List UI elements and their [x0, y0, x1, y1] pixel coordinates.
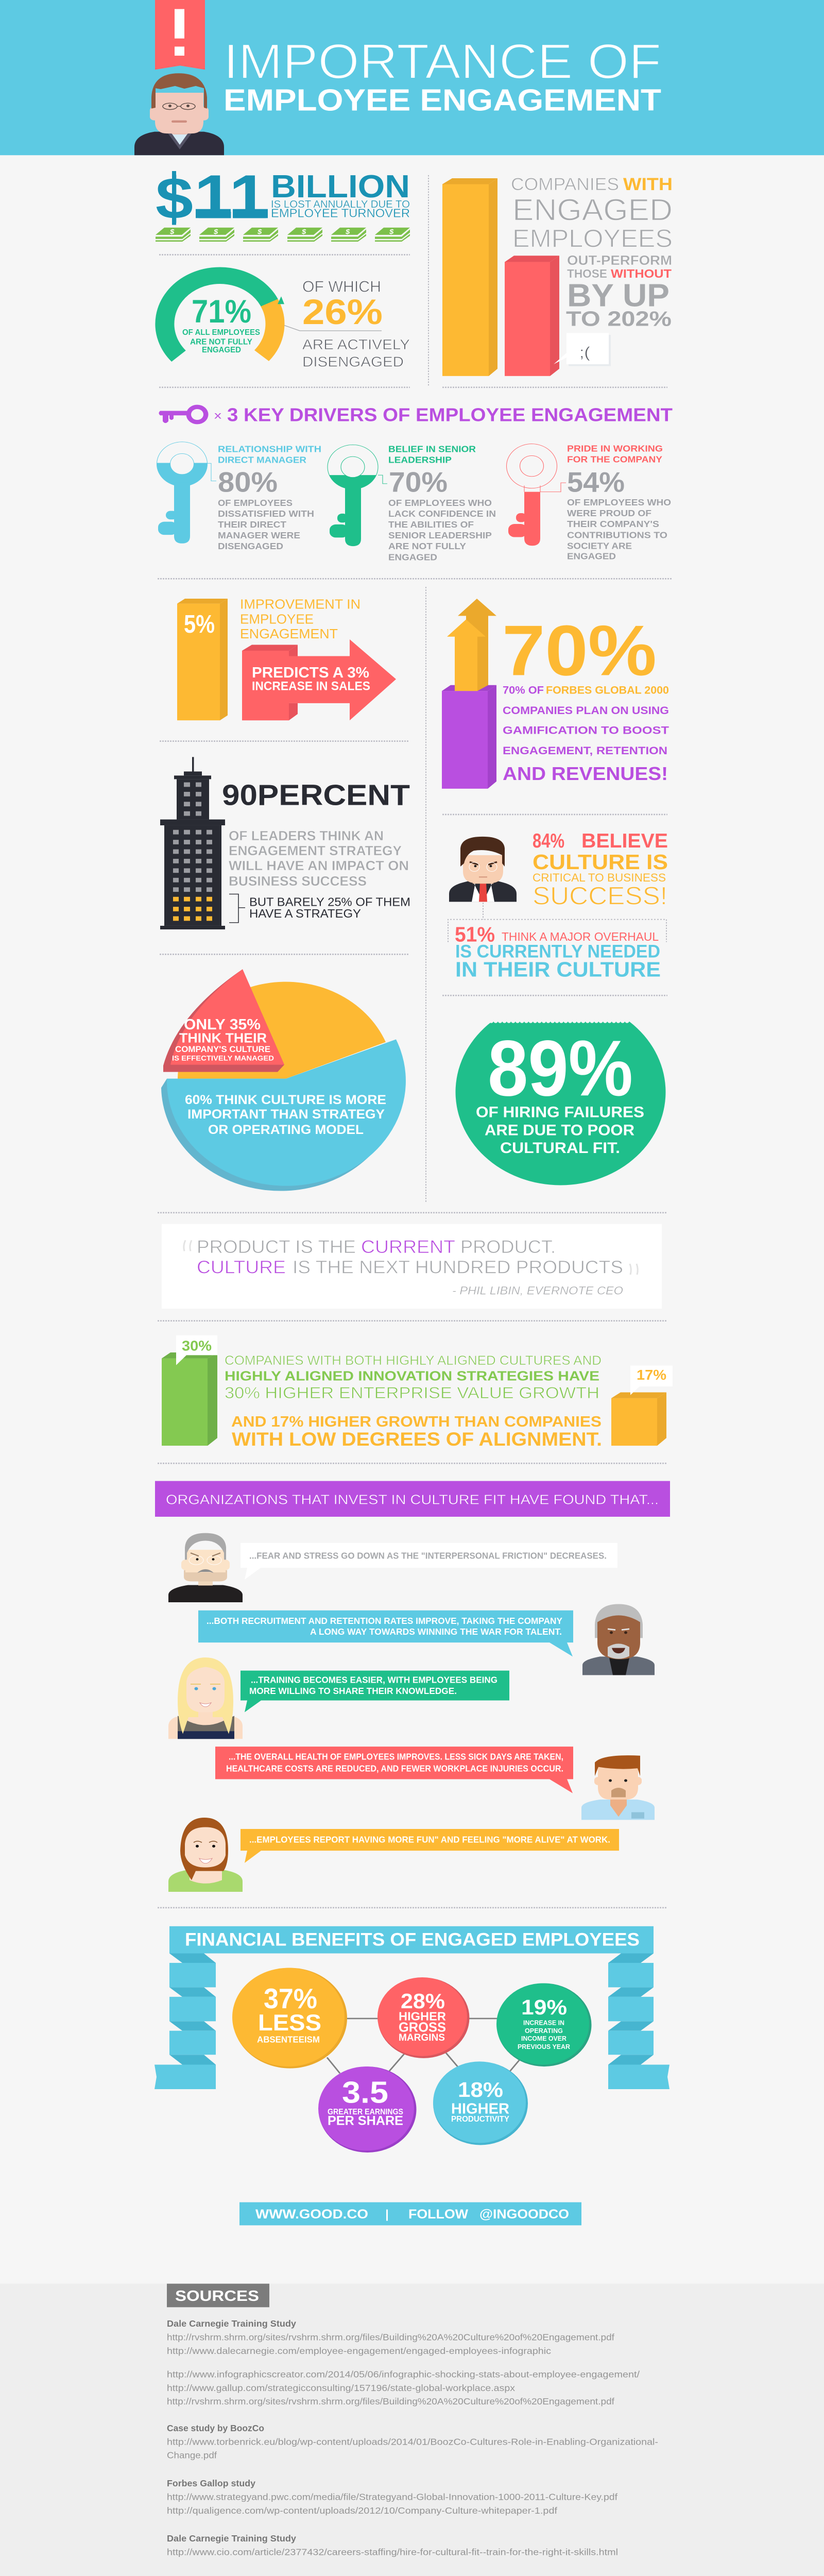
- panel: 90 percent of leaders: [160, 757, 410, 929]
- portrait: man in suit: [449, 837, 517, 902]
- quote text: PRODUCT.: [460, 1236, 556, 1257]
- speech bubble: HEALTHCARE COSTS ARE REDUCED, AND FEWER WORKPLACE INJURIES OCCUR.: [226, 1764, 563, 1773]
- connector lines: [327, 2019, 520, 2073]
- panel: driver relationship with manager: [157, 442, 321, 552]
- pie label: 35 percent: ONLY 35%: [184, 1016, 261, 1033]
- heading: $11 billion: EMPLOYEE TURNOVER: [271, 207, 410, 220]
- bubble: 37 percent less absenteeism: [232, 1968, 347, 2069]
- quote text: IS THE NEXT HUNDRED PRODUCTS: [293, 1257, 623, 1277]
- banner: culture fit: [155, 1481, 670, 1517]
- heading: $11 billion: [156, 162, 410, 231]
- text: culture critical to success: [533, 829, 668, 910]
- text: 51 percent overhaul: [455, 923, 661, 981]
- row: more fun: [168, 1818, 619, 1892]
- chart: culture pie: [161, 969, 406, 1191]
- text: culture critical to success: SUCCESS!: [533, 882, 667, 910]
- row: fear and stress: [168, 1533, 617, 1602]
- text: pride in working for the company: PRIDE IN WORKING: [567, 444, 663, 454]
- panel: driver pride in company: [507, 444, 671, 562]
- text: 51 percent overhaul: IS CURRENTLY NEEDED: [455, 941, 660, 961]
- quote text: [197, 1236, 623, 1297]
- text: 51 percent overhaul: IN THEIR CULTURE: [455, 958, 661, 981]
- text: belief in senior leadership: OF EMPLOYEES WHO: [388, 498, 492, 509]
- panel: 89 percent hiring failures: [455, 1021, 666, 1185]
- footer banner: website and social: WWW.GOOD.CO: [255, 2207, 368, 2222]
- gauge label: ARE NOT FULLY: [190, 337, 252, 346]
- bubble: 3.5 greater earnings per share: PER SHARE: [328, 2113, 403, 2128]
- pie label: 35 percent: [172, 1016, 274, 1062]
- text: 26 percent actively disengaged: 26%: [302, 292, 383, 332]
- ribbon: left: [154, 1953, 216, 2089]
- speech bubble: [215, 1747, 573, 1793]
- text: aligned cultures growth: 30% HIGHER ENTERPRISE VALUE GROWTH: [225, 1384, 599, 1402]
- gauge label: 71%: [192, 294, 251, 330]
- text: aligned cultures growth: HIGHLY ALIGNED INNOVATION STRATEGIES HAVE: [225, 1368, 599, 1383]
- source list: http://qualigence.com/wp-content/uploads/2012/10/Company-Culture-whitepaper-1.pdf: [167, 2505, 558, 2516]
- bubble: 19 percent operating income: INCOME OVER: [521, 2035, 566, 2042]
- bubble: 19 percent operating income: PREVIOUS YEAR: [518, 2043, 570, 2050]
- row: training becomes easier: [168, 1657, 509, 1739]
- text: pride in working for the company: WERE PROUD OF: [567, 509, 651, 519]
- pie label: 35 percent: IS EFFECTIVELY MANAGED: [172, 1055, 274, 1062]
- text: hiring failures: OF HIRING FAILURES: [476, 1103, 644, 1121]
- text: relationship with direct manager: RELATIONSHIP WITH: [218, 444, 321, 454]
- text: 90 percent leaders strategy: ENGAGEMENT STRATEGY: [229, 843, 402, 858]
- source list: Forbes Gallop study: [167, 2478, 255, 2488]
- sources heading: SOURCES: [175, 2287, 259, 2304]
- text: aligned cultures growth: WITH LOW DEGREES OF ALIGNMENT.: [232, 1429, 602, 1450]
- icons: money stacks: $: [257, 228, 262, 235]
- icon: purple key: [159, 405, 208, 424]
- panel: 5 percent improvement: [177, 596, 396, 720]
- quote text: CULTURE: [197, 1257, 286, 1277]
- text: companies with engaged employees: EMPLOYEES: [512, 225, 673, 253]
- text: improvement in employee engagement: ENGAGEMENT: [240, 626, 338, 641]
- portrait: woman with auburn hair: [168, 1818, 243, 1892]
- footer banner: website and social: @INGOODCO: [479, 2207, 569, 2222]
- text: relationship with direct manager: OF EMPLOYEES: [218, 498, 293, 509]
- text: relationship with direct manager: [218, 444, 321, 552]
- chart: green bar 30 percent: 30%: [182, 1338, 212, 1354]
- source list: http://www.strategyand.pwc.com/media/file/Strategyand-Global-Innovation-1000-2011-Culture-Key.pdf: [167, 2492, 618, 2502]
- panel: aligned cultures: [162, 1335, 673, 1450]
- text: companies with engaged employees: OUT-PERFORM: [567, 252, 672, 267]
- icon: skyscraper: [160, 757, 225, 929]
- portrait: man with glasses: [134, 73, 224, 155]
- icons: money stacks: $: [213, 228, 218, 235]
- bubble: 19 percent operating income: [496, 1983, 591, 2066]
- banner: culture fit: ORGANIZATIONS THAT INVEST IN CULTURE FIT HAVE FOUND THAT...: [166, 1492, 659, 1507]
- chart: yellow bar 5 percent: 5%: [184, 610, 215, 638]
- title: [224, 33, 661, 117]
- text: 90 percent leaders strategy: BUT BARELY 25% OF THEM: [249, 896, 410, 909]
- text: 70 percent forbes global 2000: 70%: [502, 610, 657, 690]
- text: relationship with direct manager: DIRECT MANAGER: [218, 455, 306, 465]
- text: 26 percent actively disengaged: [284, 277, 410, 370]
- bubble: 28 percent higher gross margins: MARGINS: [399, 2032, 445, 2043]
- text: hiring failures: ARE DUE TO POOR: [485, 1122, 634, 1139]
- text: culture critical to success: BELIEVE: [581, 829, 668, 852]
- row: recruitment and retention: [198, 1604, 655, 1675]
- speech bubble: ...THE OVERALL HEALTH OF EMPLOYEES IMPROVES. LESS SICK DAYS ARE TAKEN,: [229, 1752, 563, 1761]
- source list: Dale Carnegie Training Study: [167, 2533, 297, 2544]
- text: 51 percent overhaul: 51%: [455, 923, 495, 946]
- text: relationship with direct manager: 80%: [218, 467, 278, 498]
- speech bubble: [241, 1829, 619, 1863]
- source list: Change.pdf: [167, 2450, 217, 2460]
- text: belief in senior leadership: LEADERSHIP: [388, 455, 452, 465]
- panel: 89 percent hiring failures: 89%: [488, 1024, 633, 1112]
- text: culture critical to success: CULTURE IS: [533, 851, 668, 874]
- source list: http://www.gallup.com/strategicconsulting/157196/state-global-workplace.aspx: [167, 2383, 516, 2393]
- text: companies with engaged employees: BY UP: [567, 278, 670, 314]
- text: 70 percent forbes global 2000: ENGAGEMENT, RETENTION: [503, 744, 667, 757]
- footer banner: website and social: [239, 2202, 581, 2225]
- quote text: PRODUCT IS THE: [197, 1236, 356, 1257]
- source list: Dale Carnegie Training Study: [167, 2318, 297, 2329]
- callout: sad face speech bubble: [554, 333, 611, 366]
- chart: red bar: [505, 256, 559, 376]
- pie label: 60 percent: IMPORTANT THAN STRATEGY: [187, 1107, 385, 1122]
- portrait: grey-haired man in black: [168, 1533, 243, 1602]
- heading banner: [169, 1926, 654, 1953]
- text: 70 percent forbes global 2000: 70% OF: [503, 684, 544, 696]
- text: 26 percent actively disengaged: OF WHICH: [302, 277, 381, 295]
- text: relationship with direct manager: DISSATISFIED WITH: [218, 509, 314, 519]
- text: improvement in employee engagement: EMPLOYEE: [240, 611, 314, 626]
- text: companies with engaged employees: COMPANIES: [511, 174, 619, 194]
- sources heading: [167, 2284, 269, 2307]
- text: 70 percent forbes global 2000: FORBES GLOBAL 2000: [546, 684, 669, 696]
- gauge label: ENGAGED: [202, 346, 241, 354]
- text: belief in senior leadership: SENIOR LEADERSHIP: [388, 531, 492, 541]
- speech bubble: A LONG WAY TOWARDS WINNING THE WAR FOR TALENT.: [310, 1626, 562, 1637]
- portrait: blonde woman: [168, 1657, 243, 1739]
- panel: 84 percent believe culture: [449, 829, 668, 910]
- text: culture critical to success: 84%: [533, 829, 564, 852]
- text: 90 percent leaders strategy: HAVE A STRATEGY: [249, 908, 361, 921]
- bubble: 18 percent higher productivity: PRODUCTIVITY: [451, 2115, 509, 2124]
- text: pride in working for the company: [567, 444, 671, 562]
- speech bubble: MORE WILLING TO SHARE THEIR KNOWLEDGE.: [249, 1686, 457, 1696]
- text: companies with engaged employees: WITHOUT: [611, 268, 672, 281]
- source list: http://rvshrm.shrm.org/sites/rvshrm.shrm.org/files/Building%20A%20Culture%20of%20Engagement.pdf: [167, 2396, 615, 2406]
- speech bubble: ...TRAINING BECOMES EASIER, WITH EMPLOYEES BEING: [251, 1674, 497, 1685]
- icons: money stacks: $: [389, 228, 394, 235]
- title: EMPLOYEE ENGAGEMENT: [224, 82, 661, 117]
- bubble: 19 percent operating income: OPERATING: [525, 2027, 563, 2035]
- bubble: 37 percent less absenteeism: LESS: [258, 2010, 321, 2036]
- icons: money stacks: $: [345, 228, 350, 235]
- panel: sources: [0, 2284, 824, 2576]
- text: belief in senior leadership: ARE NOT FULLY: [388, 541, 466, 552]
- speech bubble: ...EMPLOYEES REPORT HAVING MORE FUN" AND FEELING "MORE ALIVE" AT WORK.: [249, 1834, 610, 1844]
- icons: money stacks: $: [301, 228, 306, 235]
- speech bubble: [241, 1543, 617, 1580]
- chart: donut gauge: [165, 276, 284, 356]
- speech bubble: [198, 1611, 573, 1656]
- text: pride in working for the company: SOCIETY ARE: [567, 541, 632, 551]
- text: hiring failures: CULTURAL FIT.: [500, 1139, 620, 1156]
- icon: blue key 80 percent: [157, 442, 216, 544]
- arrow: predicts 3 percent increase in sales: INCREASE IN SALES: [252, 680, 370, 693]
- text: 26 percent actively disengaged: DISENGAGED: [302, 354, 404, 370]
- text: 70 percent forbes global 2000: [502, 610, 669, 785]
- icons: money stacks: $: [169, 228, 175, 235]
- panel: quote: [162, 1224, 662, 1309]
- arrow: predicts 3 percent increase in sales: [242, 639, 396, 720]
- source list: http://www.infographicscreator.com/2014/05/06/infographic-shocking-stats-about-employee-engagement/: [167, 2369, 640, 2379]
- text: belief in senior leadership: BELIEF IN SENIOR: [388, 444, 476, 454]
- speech bubble: [241, 1671, 509, 1712]
- bubble: 37 percent less absenteeism: 37%: [264, 1983, 317, 2014]
- text: belief in senior leadership: [388, 444, 496, 563]
- gauge label: [182, 294, 260, 354]
- bubble: 3.5 greater earnings per share: 3.5: [342, 2075, 388, 2109]
- icons: money stacks: [156, 228, 410, 242]
- chart: yellow bar 17 percent: [611, 1366, 673, 1446]
- chart: yellow bar 5 percent: [177, 599, 228, 720]
- text: belief in senior leadership: THE ABILITIES OF: [388, 520, 474, 530]
- pie label: 60 percent: OR OPERATING MODEL: [208, 1123, 364, 1137]
- text: 90 percent leaders strategy: [222, 778, 410, 923]
- source list: http://www.torbenrick.eu/blog/wp-content/uploads/2014/01/BoozCo-Cultures-Role-in-Enabling-Organizational-: [167, 2436, 658, 2447]
- icon: green key 70 percent: [328, 445, 387, 546]
- text: culture critical to success: CRITICAL TO BUSINESS: [533, 871, 666, 884]
- text: improvement in employee engagement: IMPROVEMENT IN: [240, 596, 360, 612]
- heading: 3 key drivers: 3 KEY DRIVERS OF EMPLOYEE ENGAGEMENT: [227, 405, 673, 426]
- quote text: - PHIL LIBIN, EVERNOTE CEO: [452, 1284, 623, 1297]
- ribbon: right: [608, 1953, 670, 2089]
- portrait: man with goatee: [581, 1755, 655, 1820]
- panel: 70 percent gamification: [442, 599, 669, 789]
- bubble: 28 percent higher gross margins: 28%: [401, 1990, 445, 2013]
- bubble: 19 percent operating income: 19%: [521, 1996, 567, 2019]
- source list: [167, 2318, 658, 2557]
- bubble: 18 percent higher productivity: 18%: [458, 2078, 503, 2102]
- text: hiring failures: [476, 1103, 644, 1156]
- pie label: 60 percent: 60% THINK CULTURE IS MORE: [185, 1093, 386, 1107]
- chart: purple bar with rising arrows: [442, 599, 496, 789]
- chart: green bar 30 percent: [162, 1335, 217, 1446]
- bubble: 18 percent higher productivity: [433, 2061, 528, 2145]
- panel: 51 percent major overhaul: [448, 903, 666, 981]
- text: 90 percent leaders strategy: 90PERCENT: [222, 778, 410, 811]
- text: pride in working for the company: ENGAGED: [567, 552, 616, 562]
- pie label: 60 percent: [185, 1093, 386, 1137]
- chart: yellow bar 17 percent: 17%: [637, 1367, 666, 1383]
- text: aligned cultures growth: COMPANIES WITH BOTH HIGHLY ALIGNED CULTURES AND: [225, 1353, 602, 1367]
- bubble: 28 percent higher gross margins: GROSS: [399, 2019, 446, 2035]
- heading: 3 key drivers: x: [214, 410, 222, 421]
- bubble: 19 percent operating income: INCREASE IN: [523, 2019, 564, 2026]
- bubble: 37 percent less absenteeism: ABSENTEEISM: [257, 2035, 320, 2044]
- icon: red ribbon with exclamation mark: [155, 0, 205, 70]
- source list: http://rvshrm.shrm.org/sites/rvshrm.shrm.org/files/Building%20A%20Culture%20of%20Engagement.pdf: [167, 2332, 615, 2342]
- text: aligned cultures growth: [225, 1353, 602, 1450]
- footer banner: website and social: FOLLOW: [408, 2207, 468, 2222]
- pie label: 35 percent: THINK THEIR: [179, 1030, 267, 1045]
- chart: yellow bar: [442, 178, 497, 376]
- text: 70 percent forbes global 2000: COMPANIES PLAN ON USING: [503, 704, 669, 717]
- arrow: predicts 3 percent increase in sales: PREDICTS A 3%: [252, 664, 369, 681]
- quote marks: [184, 1240, 638, 1275]
- speech bubble: ...FEAR AND STRESS GO DOWN AS THE "INTERPERSONAL FRICTION" DECREASES.: [249, 1551, 607, 1561]
- heading: $11 billion: IS LOST ANNUALLY DUE TO: [271, 198, 410, 210]
- heading: $11 billion: BILLION: [271, 169, 410, 205]
- text: 90 percent leaders strategy: OF LEADERS THINK AN: [229, 828, 384, 843]
- text: relationship with direct manager: THEIR DIRECT: [218, 520, 286, 530]
- text: improvement in employee engagement: [240, 596, 360, 641]
- pie label: 35 percent: COMPANY'S CULTURE: [175, 1044, 270, 1054]
- title: IMPORTANCE OF: [224, 33, 661, 89]
- heading: $11 billion: $: [156, 165, 193, 231]
- bubble: 18 percent higher productivity: HIGHER: [451, 2100, 509, 2117]
- portrait: older man with grey beard: [582, 1604, 655, 1675]
- text: pride in working for the company: 54%: [567, 467, 625, 498]
- source list: http://www.dalecarnegie.com/employee-engagement/engaged-employees-infographic: [167, 2346, 551, 2356]
- text: belief in senior leadership: LACK CONFIDENCE IN: [388, 509, 496, 519]
- gauge label: OF ALL EMPLOYEES: [182, 328, 260, 337]
- text: 51 percent overhaul: THINK A MAJOR OVERHAUL: [502, 930, 659, 944]
- text: 90 percent leaders strategy: WILL HAVE AN IMPACT ON: [229, 858, 409, 873]
- text: belief in senior leadership: ENGAGED: [388, 552, 437, 563]
- text: belief in senior leadership: 70%: [389, 467, 448, 498]
- bubble: 28 percent higher gross margins: HIGHER: [399, 2010, 446, 2023]
- header band: [0, 0, 824, 155]
- panel: 71 percent gauge: [165, 276, 410, 370]
- text: companies with engaged employees: ENGAGED: [512, 193, 673, 227]
- bubble: 3.5 greater earnings per share: [318, 2066, 416, 2153]
- quote text: CURRENT: [361, 1236, 455, 1257]
- text: companies with engaged employees: THOSE: [567, 268, 607, 281]
- text: relationship with direct manager: DISENGAGED: [218, 541, 283, 552]
- bubble: 28 percent higher gross margins: [377, 1977, 470, 2058]
- text: companies with engaged employees: TO 202%: [566, 308, 672, 331]
- panel: engaged companies outperform: [442, 174, 673, 376]
- text: companies with engaged employees: WITH: [623, 174, 673, 194]
- panel: financial benefits: [154, 1926, 670, 2153]
- panel: 11 billion turnover: [156, 162, 410, 242]
- text: pride in working for the company: CONTRIBUTIONS TO: [567, 530, 667, 540]
- panel: driver belief in leadership: [328, 444, 496, 563]
- row: overall health: [215, 1747, 655, 1820]
- heading: $11 billion: 11: [194, 162, 268, 231]
- source list: Case study by BoozCo: [167, 2423, 264, 2433]
- text: pride in working for the company: THEIR COMPANY'S: [567, 519, 659, 530]
- text: 70 percent forbes global 2000: AND REVENUES!: [503, 764, 668, 785]
- text: pride in working for the company: FOR THE COMPANY: [567, 455, 662, 465]
- text: 26 percent actively disengaged: ARE ACTIVELY: [302, 337, 410, 353]
- speech bubble: ...BOTH RECRUITMENT AND RETENTION RATES IMPROVE, TAKING THE COMPANY: [207, 1616, 562, 1626]
- bubble: 3.5 greater earnings per share: GREATER EARNINGS: [328, 2107, 403, 2116]
- text: companies with engaged employees: [511, 174, 673, 331]
- text: pride in working for the company: OF EMPLOYEES WHO: [567, 498, 671, 508]
- callout: sad face speech bubble: ;(: [579, 344, 590, 361]
- text: 90 percent leaders strategy: BUSINESS SUCCESS: [229, 873, 367, 888]
- text: 70 percent forbes global 2000: GAMIFICATION TO BOOST: [503, 724, 669, 736]
- text: relationship with direct manager: MANAGER WERE: [218, 531, 300, 541]
- icon: red key 54 percent: [507, 444, 566, 546]
- heading banner: FINANCIAL BENEFITS OF ENGAGED EMPLOYEES: [185, 1929, 640, 1950]
- source list: http://www.cio.com/article/2377432/careers-staffing/hire-for-cultural-fit--train-for-the-right-it-skills.html: [167, 2547, 618, 2557]
- text: aligned cultures growth: AND 17% HIGHER GROWTH THAN COMPANIES: [231, 1413, 602, 1430]
